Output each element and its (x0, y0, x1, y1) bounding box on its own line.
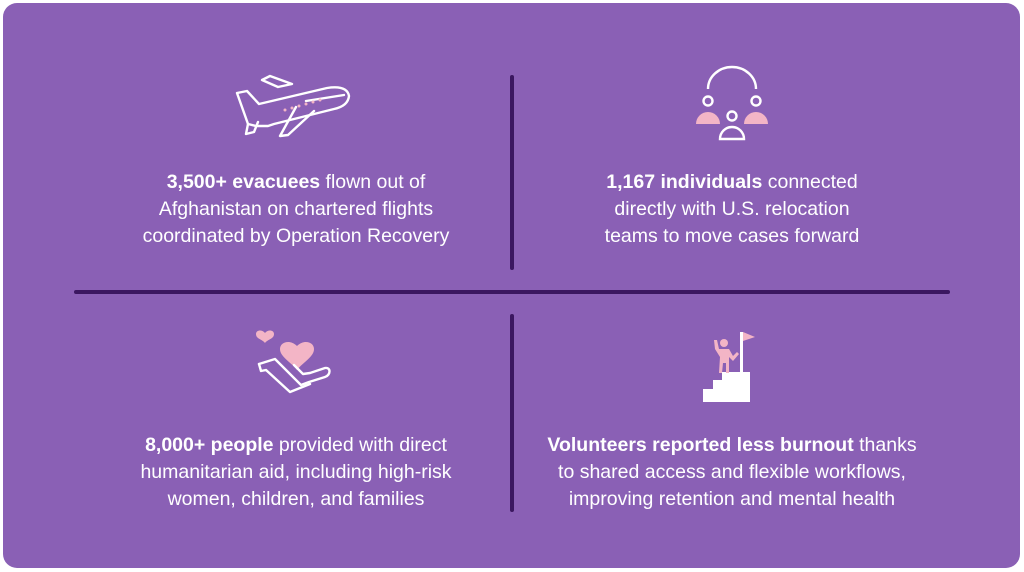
icon: connected people (696, 66, 768, 140)
vertical divider top (510, 75, 514, 270)
text block: people aid: women, children, and families (168, 488, 424, 510)
text block: volunteers (547, 434, 917, 510)
horizontal divider (74, 290, 950, 294)
text block: people aid (140, 434, 452, 510)
vertical divider bottom (510, 314, 514, 512)
icon: hand with hearts (256, 330, 331, 394)
icon: airplane (236, 74, 350, 138)
text block: individuals (604, 171, 859, 247)
text block: evacuees: 3,500+ evacuees flown out of (167, 171, 425, 193)
text block: individuals: 1,167 individuals connected (606, 171, 858, 193)
text block: individuals: directly with U.S. relocation (614, 198, 850, 220)
text block: evacuees (143, 171, 450, 247)
text block: volunteers: improving retention and mental health (569, 488, 895, 510)
icon: person on steps with flag (703, 332, 755, 402)
text block: people aid: 8,000+ people provided with direct (145, 434, 447, 456)
text block: people aid: humanitarian aid, including high-risk (140, 461, 452, 483)
text block: volunteers: Volunteers reported less burnout thanks (547, 434, 917, 456)
text block: evacuees: Afghanistan on chartered flights (159, 198, 433, 220)
text block: volunteers: to shared access and flexible workflows, (558, 461, 906, 483)
text block: individuals: teams to move cases forward (605, 225, 859, 247)
text block: evacuees: coordinated by Operation Recovery (143, 225, 449, 247)
